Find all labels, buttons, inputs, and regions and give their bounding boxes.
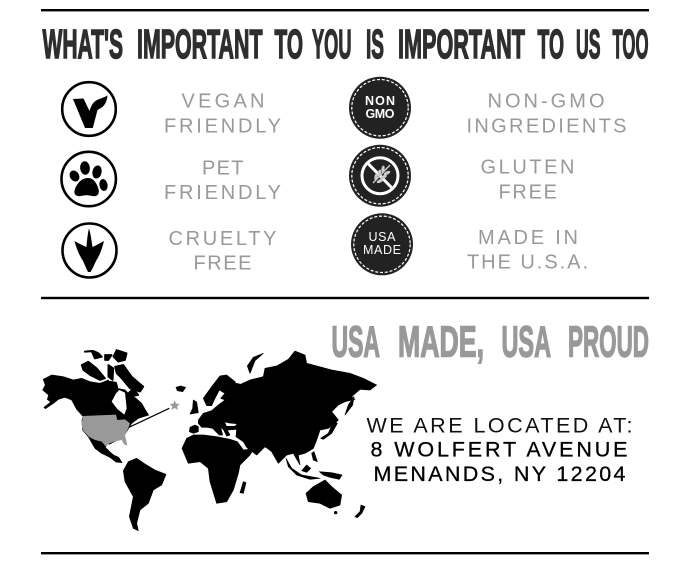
title: TO bbox=[274, 21, 303, 67]
label: gluten free bbox=[480, 156, 574, 204]
label: cruelty free: CRUELTY bbox=[168, 228, 276, 250]
title: US bbox=[576, 21, 600, 67]
label: gluten free: GLUTEN bbox=[480, 156, 574, 178]
label: made in the usa: MADE IN bbox=[478, 227, 578, 249]
icon: usa made badge bbox=[351, 213, 413, 275]
address text bbox=[366, 413, 632, 486]
title: WHAT'S bbox=[42, 21, 123, 67]
address text: WE ARE LOCATED AT: bbox=[366, 413, 632, 437]
icon: non-gmo badge bbox=[349, 77, 411, 139]
title: IMPORTANT bbox=[137, 21, 262, 67]
title bbox=[42, 21, 648, 67]
icon: non-gmo badge: GMO bbox=[366, 107, 395, 121]
label: vegan friendly: VEGAN bbox=[182, 90, 264, 112]
north america bbox=[43, 350, 149, 463]
icon: usa made badge: USA bbox=[368, 230, 396, 244]
label: vegan friendly: FRIENDLY bbox=[164, 115, 281, 137]
heading: usa made: USA bbox=[332, 318, 380, 366]
title: IS bbox=[366, 21, 384, 67]
heading: usa made bbox=[332, 318, 649, 366]
label: made in the usa bbox=[467, 227, 588, 274]
usa highlight bbox=[81, 415, 130, 447]
pointer line bbox=[129, 408, 169, 427]
hudson bay bbox=[112, 390, 127, 415]
eurasia and africa bbox=[176, 351, 377, 518]
label: non-gmo ingredients bbox=[466, 90, 626, 137]
address text: 8 WOLFERT AVENUE bbox=[370, 438, 628, 462]
title: TO bbox=[538, 21, 564, 67]
icon: usa made badge: MADE bbox=[363, 243, 401, 257]
label: made in the usa: THE U.S.A. bbox=[467, 252, 588, 274]
label: cruelty free bbox=[168, 228, 276, 274]
icon: non-gmo badge: NON bbox=[365, 94, 395, 108]
label: vegan friendly bbox=[164, 90, 281, 137]
world map bbox=[43, 350, 377, 531]
address text: MENANDS, NY 12204 bbox=[374, 462, 626, 486]
icon: gluten free badge bbox=[349, 145, 411, 207]
label: cruelty free: FREE bbox=[194, 252, 252, 274]
black sea bbox=[225, 422, 237, 426]
label: non-gmo ingredients: INGREDIENTS bbox=[466, 115, 626, 137]
title: IMPORTANT bbox=[398, 21, 525, 67]
title: YOU bbox=[312, 21, 352, 67]
label: non-gmo ingredients: NON-GMO bbox=[488, 90, 604, 112]
icon: cruelty free footprint bbox=[62, 224, 116, 278]
label: pet friendly bbox=[164, 157, 281, 204]
icon: paw bbox=[61, 152, 116, 206]
icon: vegan bbox=[62, 82, 116, 136]
label: gluten free: FREE bbox=[498, 182, 557, 204]
label: pet friendly: PET bbox=[202, 157, 244, 179]
heading: usa made: MADE, bbox=[398, 318, 484, 366]
star marker bbox=[170, 400, 180, 410]
heading: usa made: USA bbox=[502, 318, 551, 366]
south america bbox=[123, 458, 166, 531]
label: pet friendly: FRIENDLY bbox=[164, 182, 281, 204]
